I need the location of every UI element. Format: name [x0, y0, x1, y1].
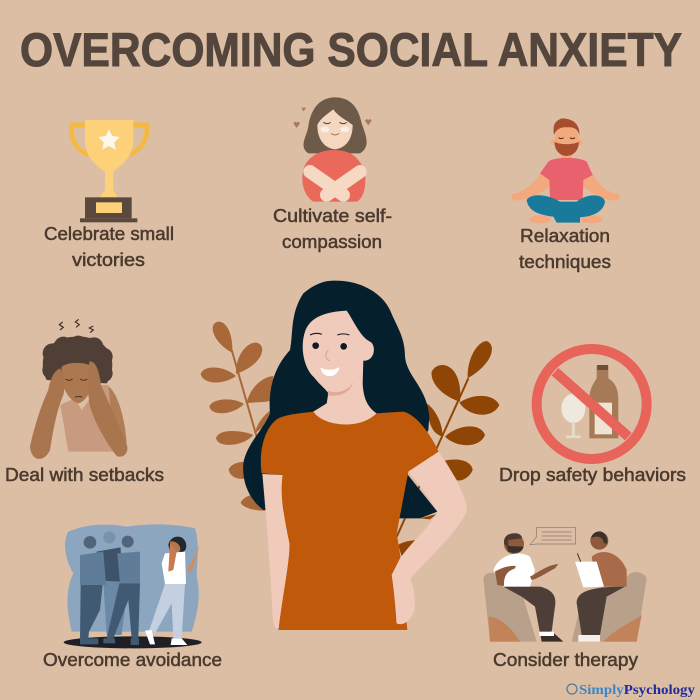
icon: trophy: [71, 120, 147, 222]
central figure: woman with leaves: [201, 281, 499, 630]
label: relaxation techniques: Relaxation: [520, 226, 610, 246]
icon: therapy session: [483, 527, 647, 642]
label: drop safety behaviors: Drop safety behaviors: [499, 465, 686, 485]
label: celebrate small victories: victories: [72, 250, 145, 270]
label: consider therapy: Consider therapy: [493, 650, 638, 670]
shirt: [261, 412, 439, 630]
left armchair: [483, 573, 537, 642]
label: deal with setbacks: Deal with setbacks: [5, 465, 164, 485]
label: relaxation techniques: [519, 226, 611, 272]
icon: self-compassion woman: [293, 97, 372, 202]
label: cultivate self-compassion: Cultivate self-: [273, 206, 392, 226]
facial features: [310, 333, 349, 376]
icon: no alcohol sign: [537, 349, 647, 459]
client: [493, 533, 563, 642]
label: celebrate small victories: Celebrate small: [44, 224, 174, 244]
icon: meditating man: [511, 118, 620, 223]
logo: SimplyPsychology: Simply Psychology: [579, 682, 695, 697]
face and neck: [303, 311, 377, 426]
arms: [392, 452, 467, 624]
icon: group and woman avoiding: [64, 524, 202, 648]
right armchair: [572, 572, 647, 642]
right leaf sprig: [397, 341, 499, 557]
speech bubble: [530, 527, 576, 545]
label: cultivate self-compassion: [273, 206, 392, 252]
label: celebrate small victories: [44, 224, 174, 270]
label: relaxation techniques: techniques: [519, 252, 611, 272]
hair: [243, 281, 437, 518]
left leaf sprig: [201, 322, 273, 511]
therapist: [575, 531, 627, 642]
label: overcome avoidance: Overcome avoidance: [43, 650, 222, 670]
label: cultivate self-compassion: compassion: [282, 232, 382, 252]
icon: stressed woman: [30, 319, 127, 459]
